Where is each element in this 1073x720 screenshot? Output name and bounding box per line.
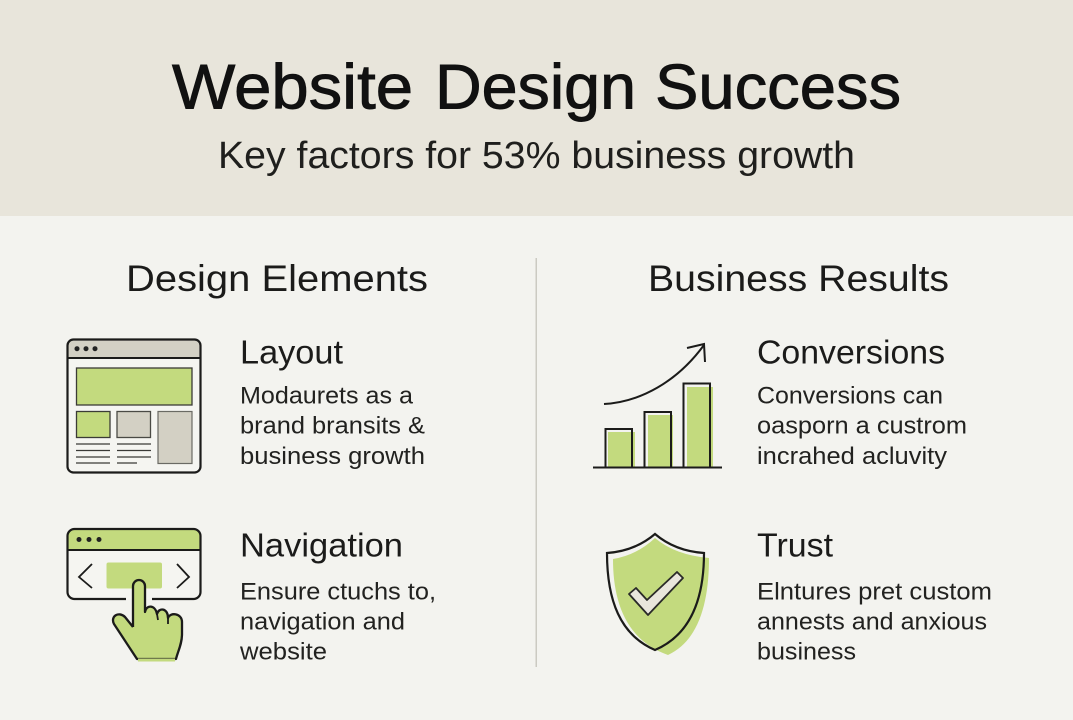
title [172,52,901,122]
text block: navigation: Navigation [240,526,403,564]
text block: layout [240,334,425,470]
text block: layout: business growth [240,443,425,470]
text block: navigation [239,526,436,666]
text block: trust: Trust [757,526,833,564]
header band [0,0,1073,216]
subtitle: Key factors for 53% business growth [218,135,855,177]
text block: conversions: Conversions can [757,382,943,410]
text block: conversions: Conversions [757,334,945,370]
text block: trust [757,526,992,666]
text block: trust: Elntures pret custom [757,578,992,606]
text block: trust: business [757,638,856,666]
panel: design elements heading: Design Elements [126,258,428,299]
icon: navigation hand [68,529,200,660]
text block: navigation: website [239,638,327,666]
icon: layout wireframe [68,340,200,472]
icon: trust shield [607,534,709,655]
text block: conversions: oasporn a custrom [757,412,967,440]
text block: layout: brand bransits & [240,412,425,440]
title: Website [172,52,413,122]
text block: layout: Modaurets as a [240,382,413,410]
text block: navigation: Ensure ctuchs to, [240,578,436,606]
icon: growth bar chart [593,344,722,468]
text block: navigation: navigation and [240,608,405,636]
text block: conversions: incrahed acluvity [757,443,948,470]
panel: business results heading: Business Results [648,258,949,299]
title: Success [655,52,901,122]
text block: layout: Layout [240,334,343,370]
text block: trust: annests and anxious [757,608,987,636]
text block: conversions [757,334,967,470]
title: Design [435,52,636,122]
